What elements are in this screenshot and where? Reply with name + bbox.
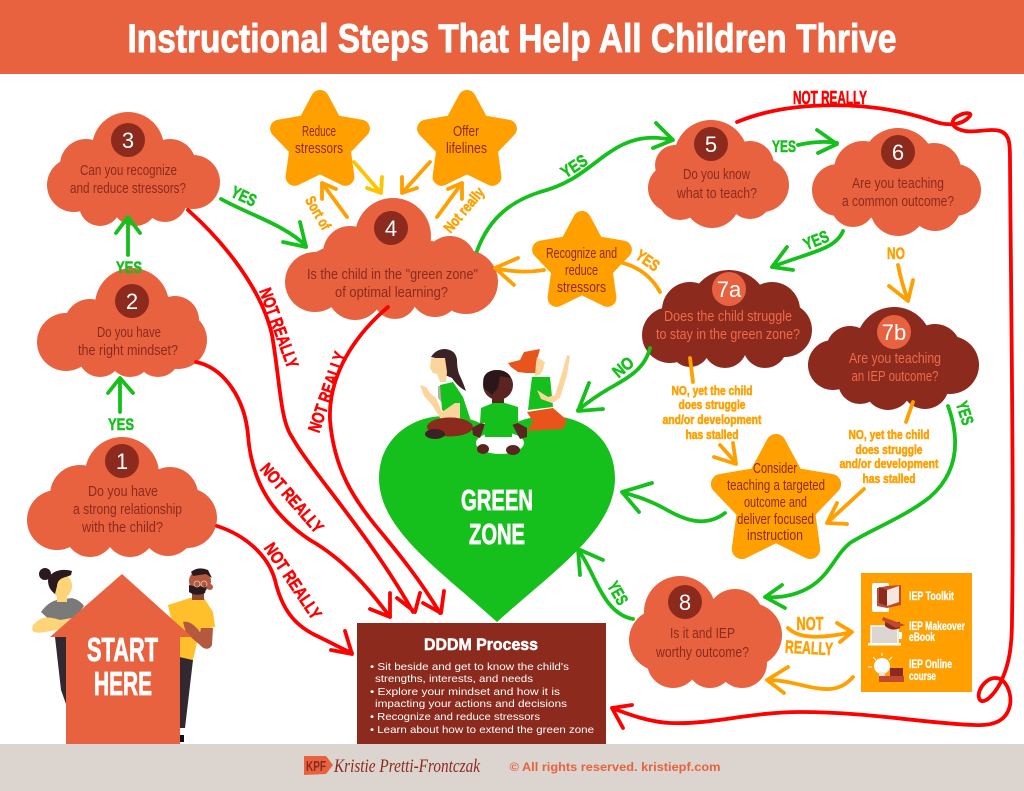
- red not really labels: NOT REALLY: [260, 539, 326, 623]
- child: boy in the middle: [472, 370, 527, 455]
- cloud 2: [37, 268, 207, 377]
- cloud 2: Do you have: [97, 325, 161, 341]
- green labels: NO: [609, 353, 638, 382]
- star: offer lifelines: lifelines: [446, 141, 487, 157]
- green zone heart: [379, 416, 615, 622]
- arrow: cloud 3 to DDDM: [188, 210, 420, 612]
- cloud 7b: 7b: [882, 320, 906, 345]
- icon: laptop and graduation cap: [868, 617, 905, 646]
- amber labels: does struggle: [678, 398, 746, 412]
- cloud 3: Can you recognize: [80, 163, 177, 179]
- cloud 2: the right mindset?: [78, 343, 178, 359]
- cloud 8: [629, 576, 782, 688]
- green labels: YES: [952, 399, 977, 428]
- cloud 5: Do you know: [683, 167, 750, 183]
- amber labels: REALLY: [785, 637, 833, 659]
- amber labels: and/or development: [840, 457, 939, 471]
- line: 7a down: [690, 358, 693, 382]
- resources panel: IEP Toolkit: [909, 591, 954, 603]
- arrow: to consider star from right text: [827, 489, 864, 524]
- arrow: recognize star to cloud 4: [495, 258, 544, 285]
- arrow: cloud 1 to cloud 2: [108, 378, 133, 412]
- cloud 4: 4: [385, 216, 397, 241]
- children sitting on the heart: [420, 349, 570, 455]
- star: consider targeted outcome: teaching a targeted: [727, 478, 825, 494]
- green labels: YES: [772, 137, 796, 156]
- green labels: YES: [116, 258, 142, 277]
- amber labels: Not really: [441, 184, 489, 236]
- cloud 5: 5: [705, 132, 717, 157]
- arrow: cloud 8 to resources: [788, 623, 852, 642]
- arrow: cloud 1 to DDDM: [217, 526, 352, 654]
- star: offer lifelines: [426, 99, 508, 177]
- cloud 6: a common outcome?: [842, 194, 954, 210]
- DDDM process panel: • Explore your mindset and how it is: [370, 686, 560, 698]
- cloud 2: 2: [126, 289, 138, 314]
- DDDM process panel: • Recognize and reduce stressors: [370, 711, 540, 723]
- cloud 5: [648, 120, 789, 228]
- start here arrow: [50, 574, 192, 744]
- footer band: KPF: [306, 758, 326, 775]
- green labels: YES: [603, 578, 632, 608]
- green labels: YES: [801, 227, 832, 254]
- red not really labels: NOT REALLY: [304, 349, 350, 435]
- amber labels: YES: [632, 247, 662, 276]
- green labels: [108, 137, 977, 608]
- cloud 1: Do you have: [88, 484, 158, 500]
- green zone heart: GREEN: [461, 485, 533, 517]
- arrow: to consider star from left text: [714, 443, 736, 464]
- footer band: © All rights reserved. kristiepf.com: [510, 760, 720, 774]
- star: consider targeted outcome: [721, 444, 831, 549]
- red not really labels: NOT REALLY: [256, 459, 328, 537]
- cloud 6: [812, 128, 981, 236]
- cloud 6: 6: [892, 140, 904, 165]
- footer band: [0, 744, 1024, 791]
- arrow: cloud 2 to cloud 3: [116, 217, 140, 255]
- cloud 4: of optimal learning?: [335, 285, 448, 301]
- resources panel: eBook: [909, 632, 935, 644]
- arrow: cloud 8 to heart: [578, 549, 633, 619]
- start here arrow: HERE: [94, 665, 152, 702]
- start here arrow: START: [87, 631, 158, 668]
- cloud 7a: Does the child struggle: [664, 309, 792, 325]
- amber labels: has stalled: [862, 472, 916, 486]
- amber labels: NO, yet the child: [672, 384, 752, 398]
- cloud 5: what to teach?: [676, 186, 757, 202]
- DDDM process panel: DDDM Process: [424, 635, 538, 654]
- cloud 3: and reduce stressors?: [70, 181, 186, 197]
- cloud 3: 3: [122, 128, 134, 153]
- amber labels: and/or development: [662, 413, 762, 427]
- star: consider targeted outcome: Consider: [753, 461, 797, 477]
- star: reduce stressors: stressors: [295, 141, 343, 157]
- star: consider targeted outcome: instruction: [747, 528, 803, 544]
- resources panel: IEP Makeover: [909, 621, 965, 633]
- resources panel: course: [909, 671, 936, 683]
- arrow: cloud 5 to cloud 6: [798, 130, 837, 153]
- green yes and no arrows: [108, 123, 955, 619]
- arrow: cloud 4 to reduce stressors: [322, 183, 347, 217]
- amber labels: NOT: [796, 614, 824, 634]
- star: recognize and reduce stressors: Recognize and: [546, 246, 617, 262]
- arrow: top loop from cloud 5 around to DDDM: [612, 105, 1013, 728]
- child: girl with dark hair: [420, 349, 473, 439]
- DDDM process panel: strengths, interests, and needs: [375, 673, 533, 685]
- star: reduce stressors: [279, 99, 361, 177]
- child: girl with red hair: [508, 349, 570, 431]
- red not really labels: [255, 88, 867, 623]
- cloud 4: [285, 198, 498, 320]
- title banner: Instructional Steps That Help All Children Thrive: [128, 17, 896, 61]
- cloud 7b: Are you teaching: [849, 351, 941, 367]
- icon: toolkit book: [872, 583, 901, 612]
- cloud 7a: 7a: [717, 277, 742, 302]
- cloud 6: Are you teaching: [852, 176, 944, 192]
- cloud 8: 8: [679, 590, 691, 615]
- amber labels: does struggle: [856, 443, 923, 457]
- cloud 8: worthy outcome?: [655, 645, 749, 661]
- arrow: cloud 6 to cloud 7b: [889, 265, 913, 301]
- DDDM process panel: [357, 623, 606, 744]
- cloud 4: Is the child in the "green zone": [307, 267, 478, 283]
- amber arrows: [322, 162, 913, 693]
- cloud 1: a strong relationship: [73, 502, 182, 518]
- DDDM process panel: • Sit beside and get to know the child's: [370, 661, 569, 673]
- icon: light bulb online course: [868, 653, 904, 682]
- star: reduce stressors: Reduce: [302, 124, 336, 140]
- line: 7b down: [906, 402, 913, 422]
- cloud 1: [27, 437, 217, 557]
- man behind start sign: [168, 568, 215, 742]
- arrow: cloud 2 to DDDM: [196, 362, 390, 617]
- star: consider targeted outcome: deliver focused: [737, 512, 814, 528]
- star: recognize and reduce stressors: stressors: [557, 280, 606, 296]
- red not really arrows: [188, 105, 1013, 728]
- woman behind start sign: [32, 568, 84, 704]
- arrow: consider star to heart: [622, 483, 725, 521]
- green labels: YES: [228, 182, 260, 211]
- star: recognize and reduce stressors: [541, 220, 623, 298]
- amber labels: [301, 184, 939, 659]
- amber labels: NO: [887, 244, 905, 263]
- cloud 1: 1: [116, 449, 128, 474]
- green zone heart: ZONE: [469, 519, 525, 551]
- amber labels: Sort of: [301, 193, 334, 234]
- amber labels: has stalled: [686, 428, 738, 442]
- red not really labels: NOT REALLY: [255, 285, 303, 371]
- arrow: cloud 3 to cloud 4: [221, 199, 306, 247]
- arrow: resources to cloud 8: [767, 667, 853, 693]
- cloud 7b: an IEP outcome?: [852, 369, 938, 385]
- arrow: cloud 7a to recognize star: [623, 263, 660, 292]
- DDDM process panel: impacting your actions and decisions: [375, 698, 567, 710]
- green labels: YES: [108, 415, 134, 434]
- red not really labels: NOT REALLY: [793, 88, 867, 108]
- amber labels: NO, yet the child: [848, 428, 930, 442]
- arrow: cloud 4 to DDDM: [330, 307, 444, 613]
- cloud 3: [47, 112, 220, 226]
- arrow: cloud 4 to offer lifelines: [437, 183, 462, 217]
- arrow: cloud 4 to cloud 5: [477, 123, 673, 251]
- arrow: offer lifelines to cloud 4: [402, 162, 430, 193]
- cloud 8: Is it and IEP: [670, 626, 735, 642]
- arrow: cloud 7a to heart: [578, 348, 650, 411]
- green labels: YES: [557, 151, 591, 182]
- arrow: cloud 7b to cloud 8: [765, 406, 955, 608]
- DDDM process panel: • Learn about how to extend the green zone: [370, 724, 594, 736]
- arrow: reduce stressors back to cloud 4: [354, 162, 382, 193]
- star: offer lifelines: Offer: [453, 124, 479, 140]
- resources panel: IEP Online: [909, 659, 952, 671]
- cloud 7a: to stay in the green zone?: [656, 327, 800, 343]
- cloud 7b: [808, 307, 979, 410]
- star: consider targeted outcome: outcome and: [744, 495, 807, 511]
- cloud 7a: [642, 270, 812, 368]
- footer band: Kristie Pretti-Frontczak: [333, 756, 480, 777]
- star: recognize and reduce stressors: reduce: [565, 263, 598, 279]
- title banner: [0, 0, 1024, 74]
- arrow: cloud 6 to cloud 7a: [772, 231, 843, 270]
- resources panel: [861, 573, 972, 692]
- cloud 1: with the child?: [81, 520, 163, 536]
